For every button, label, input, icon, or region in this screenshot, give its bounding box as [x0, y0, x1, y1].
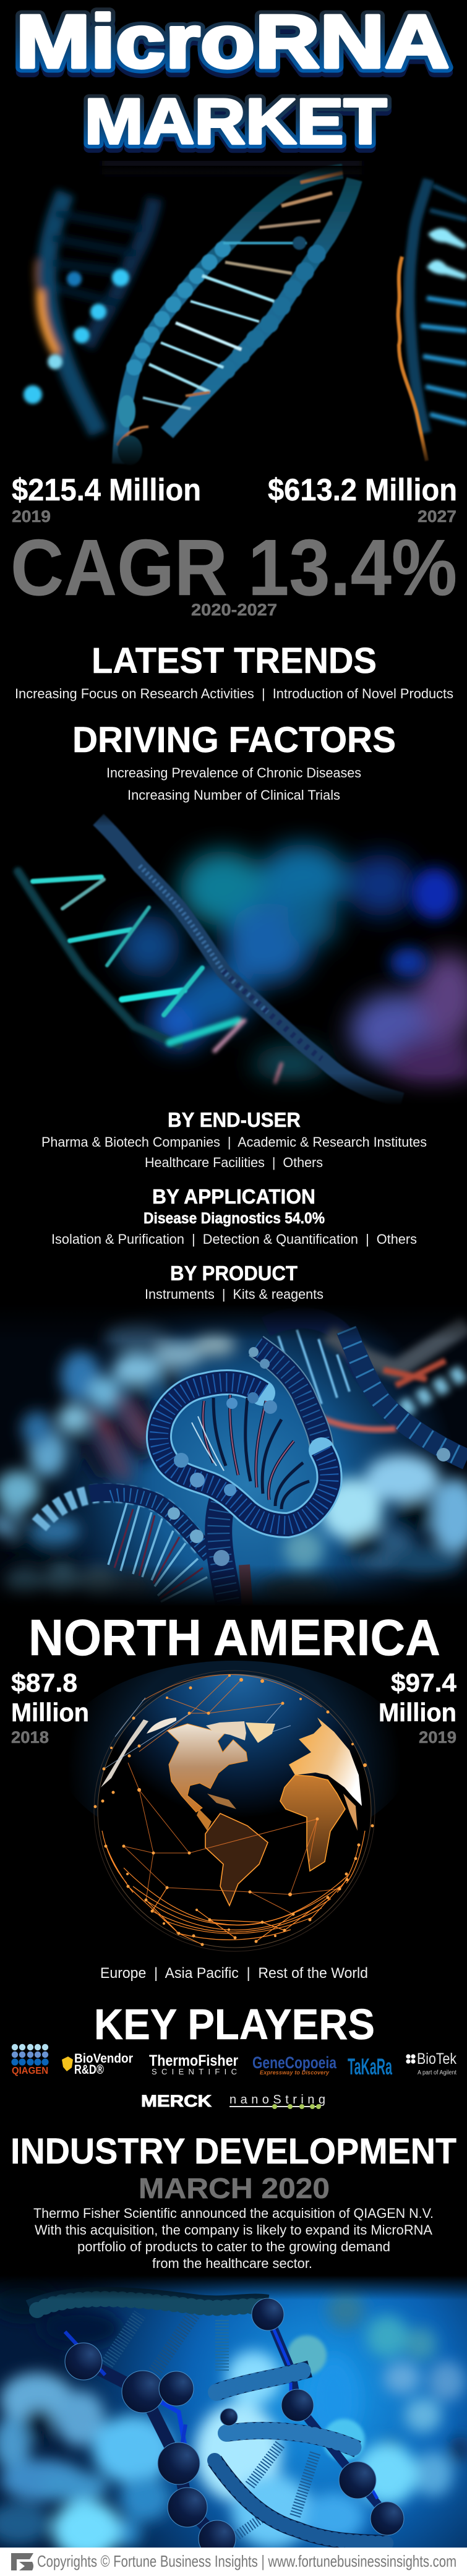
heading: industry development: INDUSTRY DEVELOPMENT — [11, 2131, 456, 2172]
stat: 2019 market value — [12, 473, 201, 526]
heading: latest trends: LATEST TRENDS — [92, 641, 377, 681]
logo: nanoString: nanoString — [229, 2093, 325, 2107]
logo: Thermo Fisher Scientific: SCIENTIFIC — [152, 2067, 237, 2076]
stat: North America 2019: 2019 — [419, 1728, 456, 1747]
stat: 2027 market value — [268, 473, 457, 526]
logo: BioTek: A part of Agilent — [418, 2069, 456, 2076]
stat: North America 2018: $87.8 — [11, 1668, 77, 1697]
segment: by product: Instruments | Kits & reagents — [145, 1286, 323, 1302]
text: industry development paragraph — [33, 2206, 434, 2271]
logo: QIAGEN: QIAGEN — [12, 2066, 48, 2076]
logo: BioVendor R&D: BioVendor — [74, 2052, 133, 2066]
title: MicroRNA: MicroRNA — [16, 0, 449, 83]
text: driving factor 1: Increasing Prevalence of Chronic Diseases — [106, 765, 361, 781]
logo: Merck: MERCK — [141, 2092, 212, 2110]
stat: North America 2018: 2018 — [11, 1728, 49, 1747]
text: industry development paragraph: With this acquisition, the company is likely to expand its MicroRNA — [35, 2222, 432, 2238]
title: MARKET: MARKET — [84, 90, 387, 162]
footer — [0, 2548, 467, 2576]
stat: North America 2019: $97.4 — [391, 1668, 457, 1697]
segment: by end-user: Pharma & Biotech Companies | Academic & Research Institutes — [41, 1134, 427, 1150]
image: glowing DNA helices (hero) — [0, 158, 467, 470]
logo: QIAGEN — [11, 2044, 49, 2076]
logo: GeneCopoeia: Expressway to Discovery — [260, 2069, 330, 2076]
stat: North America 2019: Million — [379, 1698, 456, 1727]
title: MARKET: MARKET — [84, 86, 387, 158]
text: other regions: Europe | Asia Pacific | Rest of the World — [100, 1965, 368, 1982]
stat: North America 2018: Million — [11, 1698, 89, 1727]
title: MARKET: MARKET — [84, 86, 387, 158]
globe with network — [77, 1661, 392, 1952]
segment: by product — [145, 1262, 323, 1302]
text: driving factor 2: Increasing Number of Clinical Trials — [127, 787, 340, 803]
logo: GeneCopoeia — [252, 2053, 337, 2076]
logo: Thermo Fisher Scientific — [149, 2052, 238, 2076]
image: dark beaded DNA on blue background — [0, 2275, 467, 2559]
stat: 2019 market value: $215.4 Million — [12, 473, 201, 507]
logo: BioTek: BioTek — [417, 2050, 456, 2068]
heading: driving factors: DRIVING FACTORS — [72, 720, 396, 760]
logo: Thermo Fisher Scientific: ThermoFisher — [149, 2052, 238, 2069]
logo: BioVendor R&D — [62, 2052, 133, 2077]
heading: key players: KEY PLAYERS — [94, 2000, 375, 2048]
stat: 2027 market value: 2027 — [418, 507, 456, 526]
title: MicroRNA: MicroRNA — [16, 4, 449, 88]
logo: BioVendor R&D: R&D® — [74, 2063, 104, 2077]
stat: North America 2018 — [11, 1668, 89, 1747]
logo: GeneCopoeia: GeneCopoeia — [252, 2053, 337, 2072]
stat: North America 2019 — [379, 1668, 457, 1747]
segment: by product: BY PRODUCT — [170, 1262, 298, 1285]
segment: by application: BY APPLICATION — [152, 1185, 315, 1208]
segment: by application: Disease Diagnostics 54.0% — [144, 1210, 325, 1227]
segment: by end-user: Healthcare Facilities | Others — [145, 1155, 323, 1170]
image: teal DNA strand — [0, 802, 467, 1105]
image: blue DNA double helix — [0, 1304, 467, 1608]
text: industry development paragraph: from the healthcare sector. — [152, 2256, 312, 2271]
stat: 2019 market value: 2019 — [12, 507, 51, 526]
subheading: March 2020: MARCH 2020 — [139, 2172, 330, 2204]
text: latest trends items: Increasing Focus on Research Activities | Introduction of Novel Products — [15, 686, 453, 701]
stat: 2027 market value: $613.2 Million — [268, 473, 457, 507]
segment: by application — [51, 1185, 417, 1247]
logo: Fortune Business Insights mark — [11, 2553, 33, 2570]
stat: CAGR: 2020-2027 — [191, 601, 277, 619]
logo: TaKaRa: TaKaRa — [348, 2054, 392, 2079]
title: MicroRNA: MicroRNA — [16, 0, 449, 83]
text: industry development paragraph: portfolio of products to cater to the growing demand — [77, 2239, 390, 2254]
segment: by application: Isolation & Purification | Detection & Quantification | Others — [51, 1231, 417, 1247]
segment: by end-user — [41, 1108, 427, 1170]
logo: BioTek — [406, 2050, 456, 2076]
text: industry development paragraph: Thermo Fisher Scientific announced the acquisition of QIAGEN N.V. — [33, 2206, 434, 2221]
heading: north america: NORTH AMERICA — [28, 1609, 440, 1666]
segment: by end-user: BY END-USER — [168, 1108, 301, 1131]
